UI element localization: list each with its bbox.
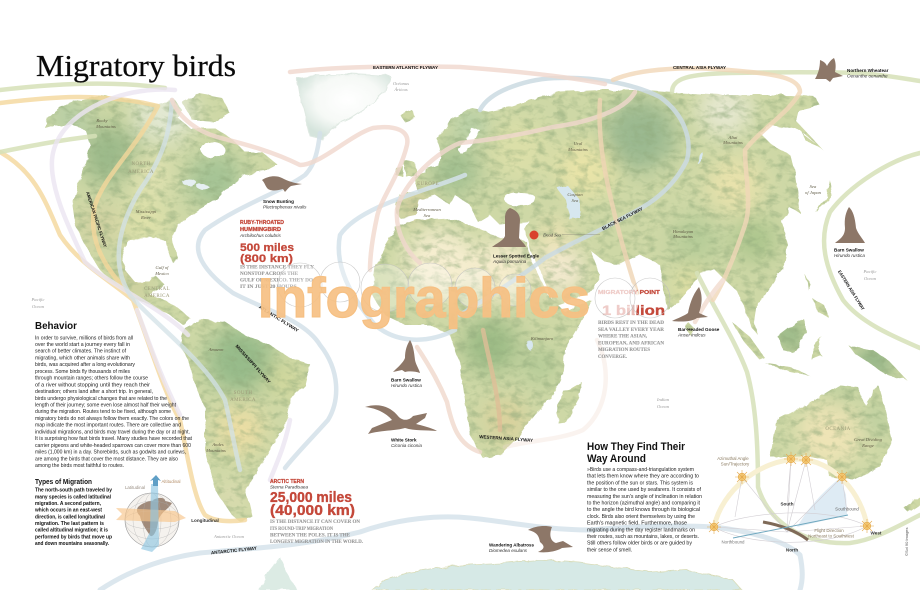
panel: Types of Migration	[34, 475, 219, 552]
map: continents relief	[45, 89, 920, 522]
sun trajectory arc	[714, 459, 867, 527]
big number: 500 miles	[240, 242, 294, 254]
body text: during the migration. Routes tend to be fixed, although some	[35, 409, 171, 415]
body text: clock. Birds also orient themselves by using the	[587, 514, 695, 520]
place: Andes Mountains: Andes	[211, 442, 224, 447]
place: Oceania: OCEANIA	[825, 427, 851, 432]
body text: through mountain ranges; others follow the course	[35, 376, 148, 382]
callout: Bar-headed Goose	[672, 287, 720, 338]
text: Barn Swallow names: Hirundo rustica	[391, 383, 422, 388]
suns	[707, 452, 874, 534]
icon: albatross silhouette	[528, 526, 573, 552]
place: Pacific Ocean east: Pacific	[862, 269, 877, 274]
body text: migrating during the day register landmarks on	[587, 527, 695, 533]
label: Black Sea Flyway: BLACK SEA FLYWAY	[601, 206, 644, 231]
text: Lesser Spotted Eagle names: Aquila pomarina	[492, 259, 527, 264]
icon: sun 3	[784, 452, 798, 466]
place: Sea of Japan: Sea	[810, 184, 817, 189]
flight path brown band	[763, 522, 808, 540]
body text: »Birds use a compass-and-triangulation system	[587, 467, 694, 473]
label: West: West	[871, 530, 882, 536]
body text: Still others follow older birds or are guided by	[587, 541, 692, 547]
globe sphere	[125, 493, 179, 547]
flyway: Western Asia (pink)	[417, 100, 637, 452]
azimuth blue wedge	[797, 478, 847, 527]
map: Antarctica	[373, 560, 742, 590]
latitudinal blue band	[141, 484, 159, 552]
panel: Behavior	[35, 321, 194, 469]
flyway: purple route	[52, 89, 290, 480]
map: Greenland	[297, 74, 390, 139]
label: Longitudinal: Longitudinal	[191, 518, 219, 523]
heading: Types of Migration	[35, 477, 92, 486]
description: IS THE DISTANCE IT CAN COVER ON	[270, 519, 360, 525]
heading: MIGRATORY POINT	[598, 290, 661, 296]
icon: sun 5	[835, 470, 849, 484]
text: Bar-headed Goose names: Bar-Headed Goose	[678, 327, 720, 332]
place: Mississippi River: River	[140, 215, 151, 220]
place: Rocky Mountains: Mountains	[95, 124, 116, 129]
callout: Barn Swallow east	[834, 207, 865, 258]
flyway: Antarctic	[100, 517, 802, 590]
body text: many species is called latitudinal	[35, 494, 111, 500]
place: Altai Mountains: Altai	[728, 135, 738, 140]
flyway: Mississippi (blue-gray)	[119, 100, 240, 470]
callout: Snow Bunting	[262, 176, 307, 210]
description: BIRDS REST IN THE DEAD	[598, 320, 664, 326]
icon: red dot	[530, 230, 538, 240]
place: Pacific Ocean west: Ocean	[32, 304, 45, 309]
bird name: ARCTIC TERN	[270, 479, 304, 485]
latin name: Archilochus colubris	[239, 233, 282, 238]
icon: stork silhouette	[365, 405, 437, 434]
description: MIGRATION ROUTES	[598, 347, 650, 353]
bird name: HUMMINGBIRD	[240, 227, 281, 233]
body text: similar to the one used by seafarers. It consists of	[587, 487, 701, 493]
globe land	[137, 500, 172, 536]
leader line	[562, 234, 600, 236]
text: Barn Swallow names: Barn Swallow	[391, 378, 421, 382]
latin name: Sterna Paradisaea	[270, 484, 308, 490]
callout: Northern Wheatear	[815, 58, 889, 82]
description: WHERE THE ASIAN,	[598, 334, 648, 340]
big number: 1 billion	[602, 302, 665, 318]
icon: sun 4	[799, 453, 813, 467]
description: EUROPEAN, AND AFRICAN	[598, 340, 664, 346]
label: American Pacific Flyway: AMERICAN PACIFIC FLYWAY	[85, 191, 108, 248]
place: Central America: CENTRAL	[144, 287, 170, 292]
place: Ural Mountains: Mountains	[567, 147, 588, 152]
altitudinal arrow	[150, 475, 161, 486]
label: North: North	[786, 548, 798, 552]
body text: birds, was acquired after a long evolutionary	[35, 362, 135, 368]
body text: of a river without stopping until they reach their	[35, 382, 150, 388]
icon: goose silhouette	[672, 287, 708, 322]
map: inland seas	[183, 127, 704, 350]
place: Mediterranean Sea: Sea	[424, 213, 431, 218]
body text: over the world start a journey every fall in	[35, 342, 130, 348]
place: Caspian Sea: Caspian	[567, 192, 583, 197]
sun compass diagram	[707, 452, 882, 552]
body text: are among the birds that cover the most distance. They are also	[35, 456, 178, 462]
body text: map indicate the most important routes. There are collective and	[35, 423, 181, 429]
body text: their sense of smell.	[587, 547, 632, 553]
label: Mississippi Flyway: MISSISSIPPI FLYWAY	[235, 344, 272, 384]
place: Pacific Ocean east: Ocean	[864, 276, 877, 281]
place: Mississippi River: Mississippi	[135, 209, 157, 214]
label: Southbound: Southbound	[835, 506, 859, 512]
text: White Stork names: White Stork	[391, 438, 417, 442]
text: Northern Wheatear names: Northern Wheatear	[847, 68, 889, 73]
place: Indian Ocean: Ocean	[657, 404, 670, 409]
label: Eastern Asia Flyway: EASTERN ASIA FLYWAY	[837, 269, 866, 311]
heading: Behavior	[35, 321, 77, 332]
text: Barn Swallow names: Barn Swallow	[834, 248, 864, 252]
place: Oceanus Arcticus: Árticus	[393, 87, 408, 92]
callout: Lesser Spotted Eagle	[492, 208, 539, 264]
heading: Way Around	[587, 453, 646, 465]
place: North America: AMERICA	[128, 170, 154, 175]
title: Migratory birds	[36, 48, 236, 83]
place: Rocky Mountains: Rocky	[95, 118, 109, 123]
place: Great Dividing Range: Great Dividing	[854, 437, 883, 442]
flyway: American Pacific (yellow)	[0, 97, 245, 521]
icon: sun 2	[735, 470, 749, 484]
icon: eagle silhouette	[492, 208, 526, 247]
angle lines	[714, 459, 867, 542]
place: Central America: AMERICA	[144, 294, 170, 299]
body text: direction, is called longitudinal	[35, 514, 105, 520]
callout: Dead Sea marker	[530, 230, 600, 240]
text: Wandering Albatross names: Wandering Albatross	[489, 542, 534, 548]
label: Latitudinal: Latitudinal	[125, 485, 145, 490]
icon: swallow silhouette	[393, 340, 420, 373]
label: Azimuthal Angle: Azimuthal Angle	[717, 456, 749, 461]
body text: to the angle the bird knows through its biological	[587, 507, 700, 513]
text: White Stork names: Ciconia ciconia	[391, 443, 422, 448]
callout: Ruby-throated Hummingbird	[239, 220, 314, 290]
text: Snow Bunting names: Snow Bunting	[263, 199, 294, 204]
place: Altai Mountains: Mountains	[722, 140, 743, 145]
body text: destination; others land after a short trip. In general,	[35, 389, 153, 395]
callout: Arctic Tern	[270, 479, 364, 545]
place: South America: AMERICA	[230, 398, 256, 403]
body text: among the birds most faithful to routes.	[35, 463, 124, 469]
place: Sea of Japan: of Japan	[805, 190, 822, 195]
flight direction line	[733, 515, 848, 538]
place: Gulf of Mexico: Gulf of	[156, 265, 169, 270]
label: Eastern Atlantic Flyway: EASTERN ATLANTIC FLYWAY	[373, 65, 438, 70]
callout: Wandering Albatross	[489, 526, 573, 553]
flyway labels	[85, 65, 866, 555]
callout: White Stork	[365, 405, 437, 448]
body text: to the horizon (azimuthal angle) and comparing it	[587, 500, 700, 506]
icon: snow bunting silhouette	[262, 176, 302, 192]
label: Flight Direction: Flight Direction	[814, 528, 844, 533]
watermark	[258, 262, 670, 329]
body text: called altitudinal migration; it is	[35, 528, 108, 534]
body text: the position of the sun or stars. This system is	[587, 480, 693, 486]
place: Caspian Sea: Sea	[572, 198, 579, 203]
icon: wheatear silhouette	[815, 58, 843, 82]
heading: How They Find Their	[587, 441, 686, 453]
description: CONVERGE.	[598, 354, 628, 360]
body text: their routes, such as mountains, lakes, or deserts.	[587, 534, 699, 540]
body text: that lets them know where they are according to	[587, 474, 699, 480]
globe upper right land	[153, 498, 165, 504]
description: BETWEEN THE POLES. IT IS THE	[270, 532, 350, 538]
label: Flight Direction: Northeast to Southwest	[808, 534, 855, 538]
place: Great Dividing Range: Range	[861, 443, 874, 448]
body text: length of their journey; some even lose almost half their weight	[35, 402, 176, 408]
text: Bar-headed Goose names: Anser indicus	[677, 332, 706, 338]
description: NONSTOP ACROSS THE	[240, 271, 298, 277]
body text: migratory birds do not always follow them exactly. The colors on the	[35, 416, 189, 422]
bird name: RUBY-THROATED	[240, 220, 284, 226]
map place labels	[30, 81, 883, 539]
place: Andes Mountains: Mountains	[205, 448, 226, 453]
place: Amazon: Amazon	[208, 347, 224, 352]
body text: birds undergo physiological changes that are related to the	[35, 396, 167, 402]
icon: sun 6	[860, 519, 874, 533]
fading overlay from watermark	[591, 276, 639, 324]
place: Ural Mountains: Ural	[574, 141, 583, 146]
label: Dead Sea: Dead Sea	[542, 232, 562, 238]
icon: sun 1	[707, 520, 721, 534]
place: North America: NORTH	[132, 162, 150, 167]
place: Kilimanjaro: Kilimanjaro	[530, 336, 554, 341]
credit: ©Sol 90 Images	[904, 527, 909, 556]
place: Gulf of Mexico: Mexico	[154, 271, 169, 276]
text: Lesser Spotted Eagle names: Lesser Spotted Eagle	[493, 254, 539, 258]
label: Antarctic Flyway: ANTARCTIC FLYWAY	[211, 546, 257, 555]
text: Wandering Albatross names: Diomedea exulans	[489, 548, 528, 553]
description: IT IN JUST 20 HOURS.	[240, 284, 299, 290]
place: Oceanus Arcticus: Océanus	[393, 81, 409, 86]
place: Europe: EUROPE	[417, 182, 439, 187]
place: Himalayan Mountains: Mountains	[672, 234, 693, 239]
body text: Earth's magnetic field. Furthermore, those	[587, 521, 687, 527]
text: Snow Bunting names: Plectrophenax nivalis	[263, 204, 307, 210]
longitudinal band	[116, 508, 186, 522]
flyway: Black Sea (blue-gray)	[460, 78, 689, 315]
body text: migrating, which other animals share with	[35, 356, 130, 362]
text: Northern Wheatear names: Oenanthe oenanthe	[847, 74, 888, 78]
flyway: Eastern Atlantic (pink)	[172, 67, 635, 270]
body text: miles (1,000 km) in a day. Shorebirds, such as godwits and curlews,	[35, 450, 186, 456]
place: Pacific Ocean west: Pacific	[30, 297, 45, 302]
label: Central Asia Flyway: CENTRAL ASIA FLYWAY	[673, 65, 726, 70]
big number: 25,000 miles	[270, 490, 352, 506]
label: Azimuthal Angle: Sun/Trajectory	[721, 462, 750, 466]
body text: In order to survive, millions of birds from all	[35, 335, 133, 341]
body text: which occurs in an east-west	[34, 508, 102, 514]
callout: Dead Sea migratory point	[591, 276, 665, 360]
text: Barn Swallow names: Hirundo rustica	[834, 253, 865, 258]
globe diagram	[116, 475, 219, 552]
watermark text: Infographics	[258, 266, 590, 329]
description: GULF OF MEXICO. THEY DO	[240, 278, 313, 284]
flyway: northern green routes	[0, 72, 920, 543]
flyway: Western Europe (blue-gray)	[339, 175, 465, 340]
body text: measuring the sun's angle of inclination in relation	[587, 494, 702, 500]
label: Atlantic Flyway: ATLANTIC FLYWAY	[258, 304, 300, 333]
flyway: Central Asia (orange-pink)	[613, 68, 800, 322]
body text: individual migrations, and birds may travel during the day or at night.	[35, 429, 190, 435]
body text: and down mountains seasonally.	[35, 541, 109, 547]
place: Mediterranean Sea: Mediterranean	[412, 207, 441, 212]
callout: Barn Swallow Africa	[391, 340, 422, 388]
big number: (40,000 km)	[270, 503, 355, 519]
description: IS THE DISTANCE THEY FLY	[240, 264, 314, 270]
description: LONGEST MIGRATION IN THE WORLD.	[270, 539, 364, 545]
description: SEA VALLEY EVERY YEAR	[598, 327, 664, 333]
watermark rings	[278, 262, 670, 318]
body text: migration. A second pattern,	[35, 501, 101, 507]
label: Northbound: Northbound	[722, 540, 745, 544]
icon: swallow silhouette	[835, 207, 865, 243]
place: Antarctic Ocean: Antarctic Ocean	[213, 534, 245, 539]
body text: carrier pigeons and white-headed sparrows can cover more than 600	[35, 443, 191, 449]
place: Indian Ocean: Indian	[656, 397, 670, 402]
label: Western Asia Flyway: WESTERN ASIA FLYWAY	[479, 434, 533, 443]
body text: performed by birds that move up	[35, 534, 113, 540]
body text: It is surprising how fast birds travel. Many studies have recorded that	[35, 436, 192, 442]
place: Himalayan Mountains: Himalayan	[672, 229, 694, 234]
map: Antarctic peninsula	[258, 557, 297, 590]
label: Altitudinal: Altitudinal	[161, 479, 181, 484]
panel: How They Find Their Way Around	[587, 441, 704, 553]
description: ITS ROUND-TRIP MIGRATION	[270, 526, 333, 532]
globe grid	[125, 493, 179, 547]
body text: process. Some birds fly thousands of miles	[35, 369, 130, 375]
flyway: Atlantic (blue-gray)	[198, 133, 336, 468]
body text: search of better climates. The instinct of	[35, 349, 126, 355]
place: South America: SOUTH	[234, 391, 252, 396]
body text: The north-south path traveled by	[35, 488, 113, 494]
big number: (800 km)	[240, 253, 293, 265]
body text: migration. The last pattern is	[35, 521, 104, 527]
label: South: South	[780, 502, 794, 506]
